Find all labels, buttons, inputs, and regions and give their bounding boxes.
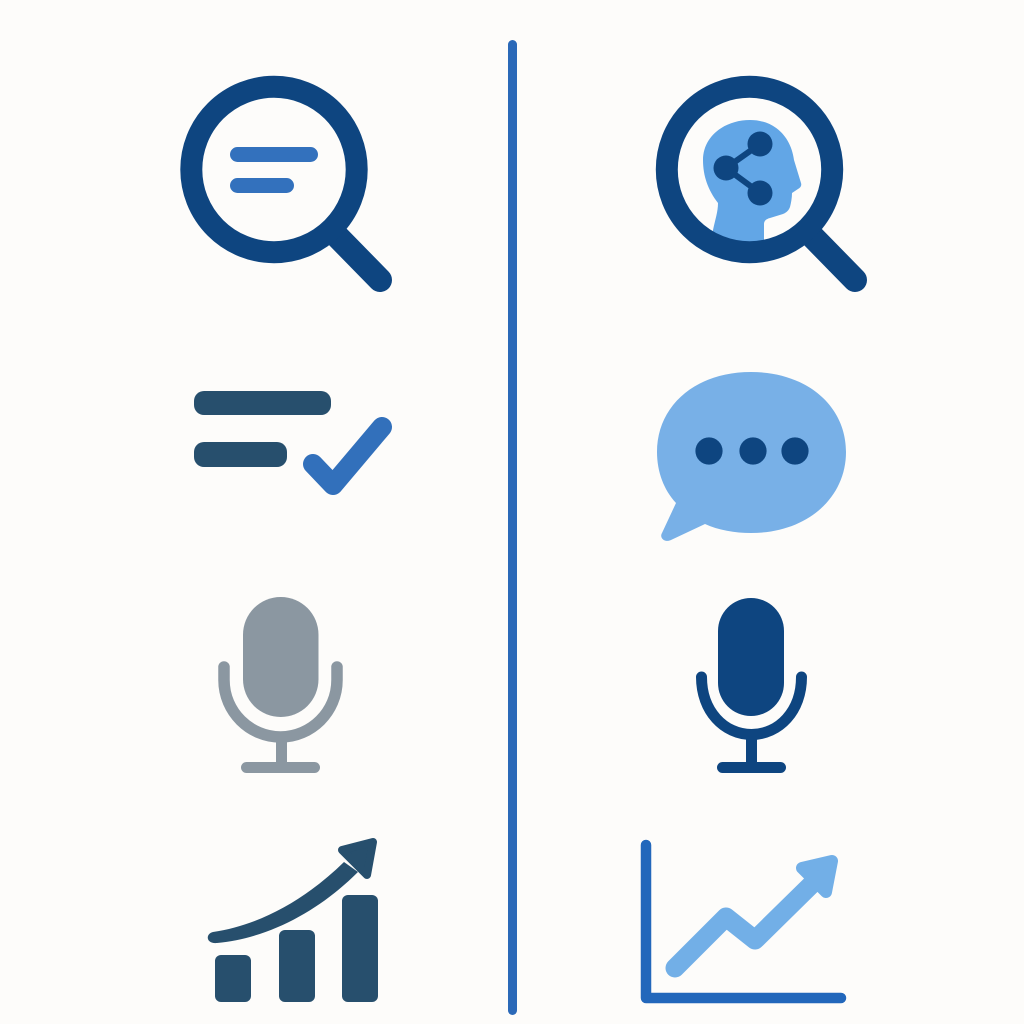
- icon: magnifier with AI head: [667, 87, 855, 280]
- icon: checklist: [194, 391, 382, 485]
- center divider: [508, 40, 517, 1015]
- icon: magnifier with text lines: [191, 87, 380, 280]
- icon: grey microphone: [224, 597, 337, 773]
- icon: bar chart with rising arrow: [208, 842, 378, 1002]
- icon: speech bubble: [657, 372, 846, 541]
- icon: dark blue microphone: [702, 598, 802, 773]
- icon: line chart with arrow: [646, 845, 841, 998]
